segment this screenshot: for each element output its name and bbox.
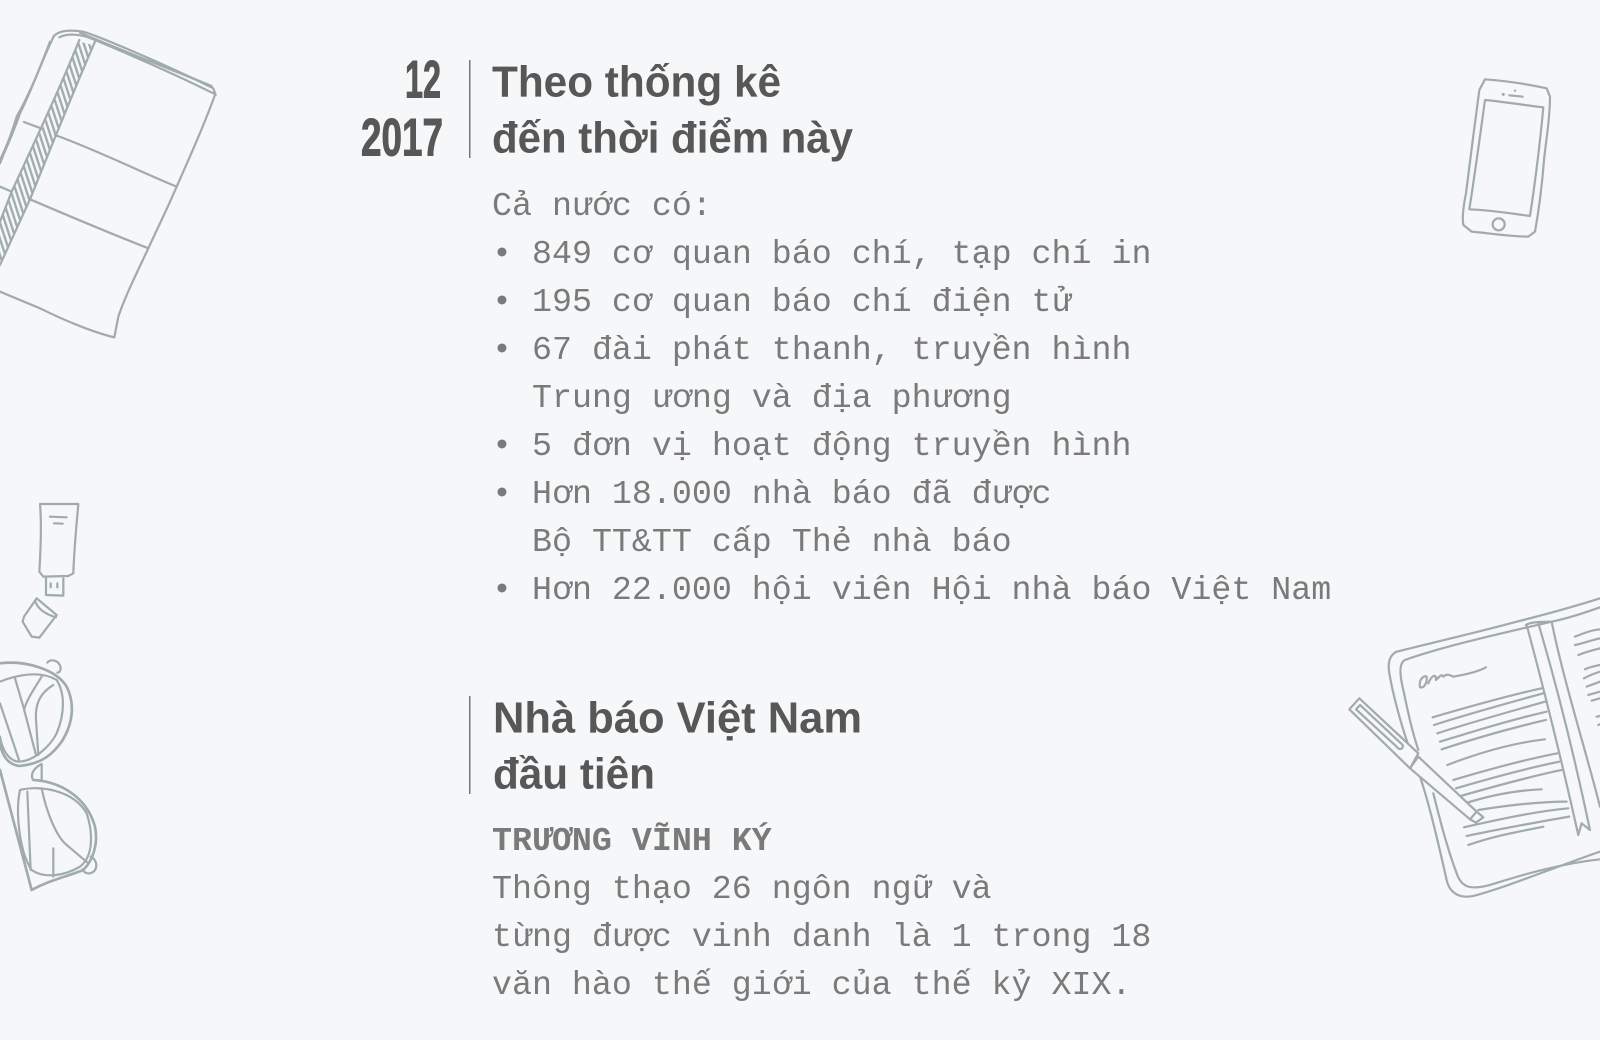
text block: statistics list: 5 đơn vị hoạt động truyền hình <box>532 427 1131 465</box>
heading: Theo thống kê <box>492 58 853 162</box>
text block: statistics list: • <box>492 235 512 273</box>
divider: first heading <box>469 60 470 158</box>
text block: Trương Vĩnh Ký: Thông thạo 26 ngôn ngữ và <box>492 870 992 908</box>
heading: Theo thống kê: Theo thống kê <box>492 58 781 106</box>
text block: statistics list: 67 đài phát thanh, truyền hình <box>532 331 1131 369</box>
date: 12/2017: 12 <box>405 50 441 110</box>
heading: Nhà báo Việt Nam đầu tiên <box>493 694 862 798</box>
text block: statistics list: Trung ương và địa phương <box>532 379 1012 417</box>
icon: USB stick <box>23 504 78 638</box>
text block: Trương Vĩnh Ký: TRƯƠNG VĨNH KÝ <box>492 822 772 860</box>
text block: statistics list: Cả nước có: <box>492 187 712 225</box>
text block: statistics list: • <box>492 283 512 321</box>
icon: glasses <box>0 660 96 890</box>
date: 12/2017 <box>361 50 443 168</box>
divider: second heading <box>469 696 470 794</box>
icon: open notebook and pen <box>1349 598 1600 897</box>
icon: notebook top left <box>0 31 216 337</box>
text block: statistics list: • <box>492 331 512 369</box>
text block: statistics list: 849 cơ quan báo chí, tạp chí in <box>532 235 1151 273</box>
icon: smartphone top right <box>1463 79 1550 237</box>
text block: statistics list <box>492 187 1331 609</box>
text block: Trương Vĩnh Ký: văn hào thế giới của thế kỷ XIX. <box>492 966 1131 1004</box>
text block: statistics list: Hơn 18.000 nhà báo đã được <box>532 475 1052 513</box>
text block: statistics list: • <box>492 475 512 513</box>
text block: Trương Vĩnh Ký <box>492 822 1151 1004</box>
text block: Trương Vĩnh Ký: từng được vinh danh là 1 trong 18 <box>492 918 1151 956</box>
heading: Theo thống kê: đến thời điểm này <box>492 114 853 162</box>
text block: statistics list: 195 cơ quan báo chí điện tử <box>532 283 1073 321</box>
text block: statistics list: • <box>492 571 512 609</box>
heading: Nhà báo Việt Nam đầu tiên: Nhà báo Việt Nam <box>493 694 862 742</box>
text block: statistics list: Hơn 22.000 hội viên Hội nhà báo Việt Nam <box>532 571 1331 609</box>
text block: statistics list: Bộ TT&TT cấp Thẻ nhà báo <box>532 523 1012 561</box>
date: 12/2017: 2017 <box>361 108 443 168</box>
heading: Nhà báo Việt Nam đầu tiên: đầu tiên <box>493 750 655 798</box>
text block: statistics list: • <box>492 427 512 465</box>
